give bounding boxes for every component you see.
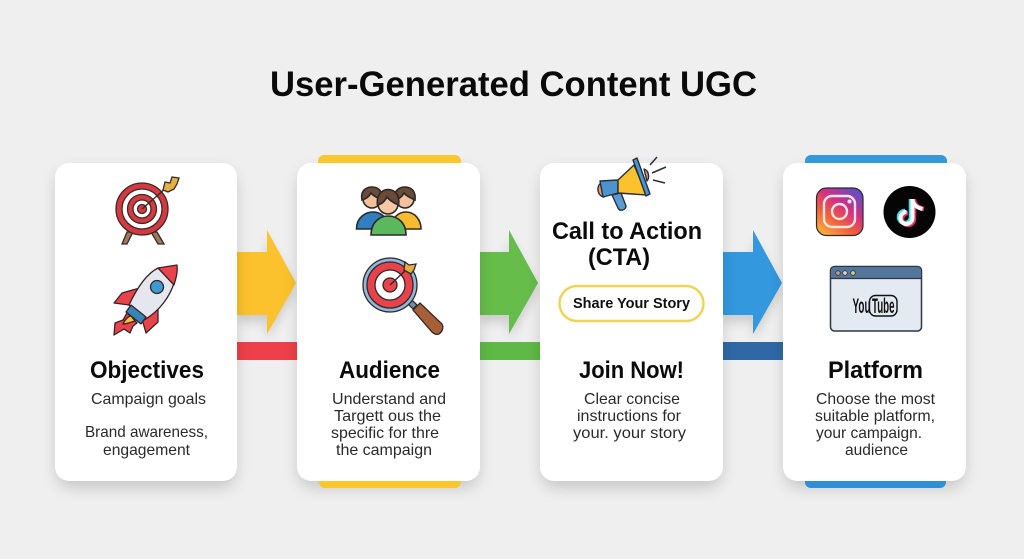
text: campaign goals: Campaign goals [91, 391, 206, 408]
text: platform description: audience [845, 442, 908, 459]
icon: youtube browser window: Tube [872, 295, 894, 318]
panel: platform [783, 155, 966, 488]
heading: call to action: Call to Action [552, 218, 702, 245]
text: engagement: engagement [103, 442, 191, 459]
text: cta description: instructions for [577, 408, 682, 425]
heading: join now: Join Now! [579, 357, 684, 384]
icon: group of people [356, 187, 421, 235]
panel: call to action [540, 157, 723, 487]
text: audience description [331, 391, 446, 459]
icon: tiktok [884, 186, 936, 238]
arrow: objectives to audience [237, 230, 297, 360]
heading: cta abbreviation: (CTA) [588, 244, 650, 271]
text: brand awareness: Brand awareness, [85, 424, 208, 441]
icon: megaphone [598, 157, 666, 210]
heading: audience: Audience [339, 357, 440, 384]
panel: objectives [55, 163, 237, 487]
text: cta description: Clear concise [584, 391, 680, 408]
text: audience description: Targett ous the [334, 408, 441, 425]
text: platform description: suitable platform, [815, 408, 935, 425]
text: platform description [815, 391, 936, 459]
arrow: call to action to platform [723, 230, 783, 360]
button: share your story [560, 286, 704, 321]
text: audience description: specific for thre [331, 425, 439, 442]
icon: target with arrow [116, 177, 179, 244]
heading: platform: Platform [828, 357, 923, 384]
icon: youtube browser window: You [852, 295, 870, 318]
panel: audience [297, 155, 480, 488]
text: cta description [573, 391, 686, 442]
title: User-Generated Content UGC [270, 65, 757, 104]
icon: magnifier with target [363, 258, 443, 334]
text: platform description: Choose the most [816, 391, 936, 408]
icon: youtube browser window [830, 266, 922, 331]
text: audience description: the campaign [336, 442, 432, 459]
arrow: audience to call to action [480, 230, 540, 360]
icon: instagram [816, 188, 863, 236]
heading: objectives: Objectives [90, 357, 204, 384]
button: share your story: Share Your Story [573, 295, 691, 312]
icon: rocket [114, 265, 177, 335]
text: platform description: your campaign. [816, 425, 922, 442]
text: cta description: your. your story [573, 425, 686, 442]
text: audience description: Understand and [332, 391, 446, 408]
